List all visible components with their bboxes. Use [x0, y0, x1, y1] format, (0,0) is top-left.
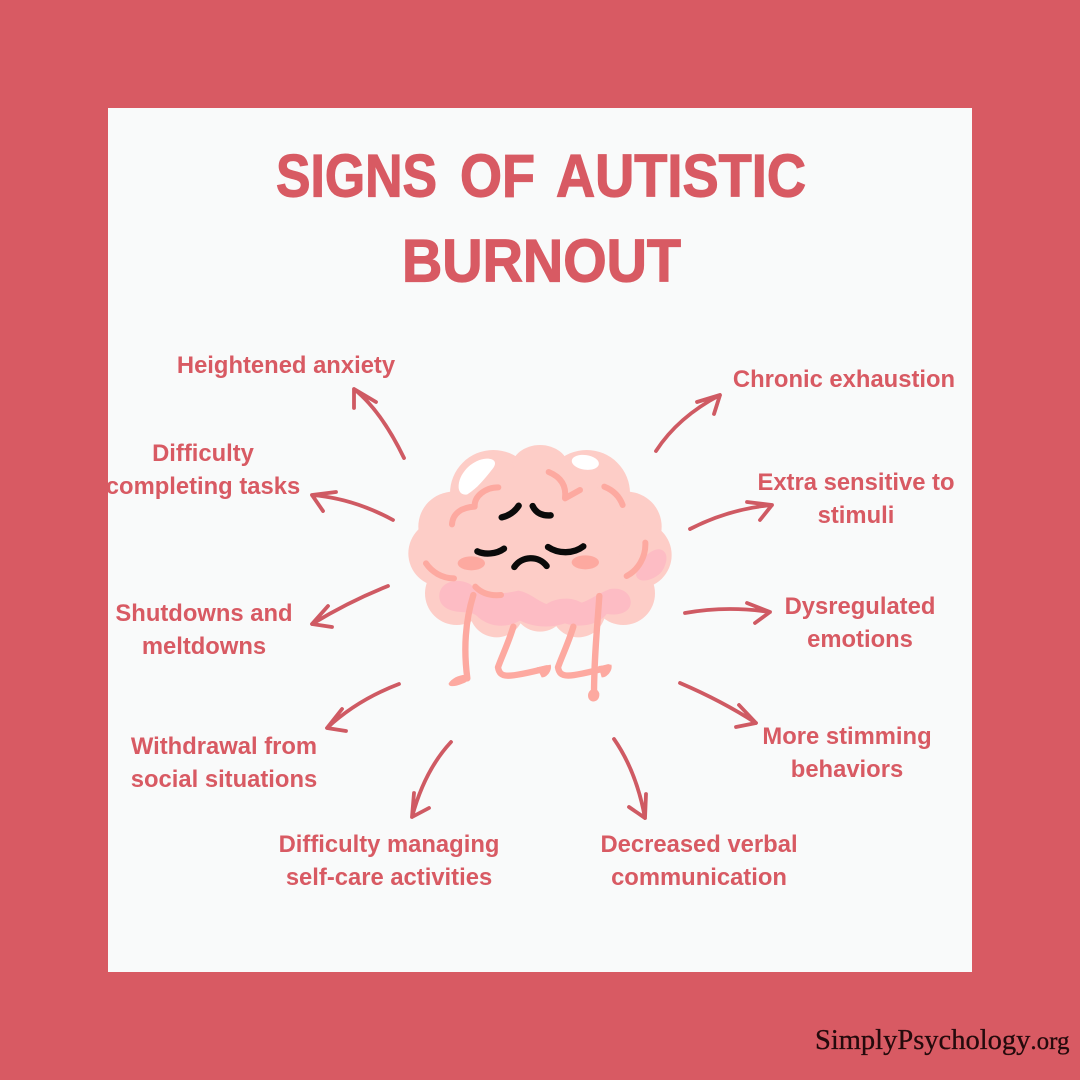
feet [449, 675, 469, 686]
shine highlights [459, 459, 495, 495]
label: Dysregulated emotions: emotions [807, 626, 913, 653]
source credit: SimplyPsychology.org [815, 1025, 1070, 1056]
label: More stimming behaviors: More stimming [762, 723, 932, 750]
label: Decreased verbal communication: Decreased verbal [600, 831, 798, 858]
title: BURNOUT [402, 228, 681, 294]
label: Decreased verbal communication: communication [611, 864, 787, 891]
label: Dysregulated emotions: Dysregulated [785, 593, 935, 620]
label: Difficulty managing self-care activities: Difficulty managing [279, 831, 499, 858]
arrow: to Dysregulated emotions [685, 603, 770, 623]
panel: white card [108, 108, 972, 972]
title: SIGNS [276, 142, 437, 210]
arrow: to Difficulty completing tasks [312, 492, 393, 520]
icon: sad brain character [408, 445, 672, 701]
arrow: to More stimming behaviors [680, 683, 756, 727]
face [477, 506, 583, 567]
title: AUTISTIC [556, 142, 806, 210]
label: Shutdowns and meltdowns: Shutdowns and [115, 600, 293, 627]
arrow: to Chronic exhaustion [656, 395, 720, 451]
label: Chronic exhaustion: Chronic exhaustion [733, 366, 955, 393]
label: Shutdowns and meltdowns: meltdowns [142, 633, 266, 660]
label: Difficulty managing self-care activities: self-care activities [286, 864, 492, 891]
label: Withdrawal from social situations: Withdrawal from [131, 733, 317, 760]
cheeks [458, 556, 485, 570]
brain folds [426, 472, 645, 595]
brain body [408, 445, 672, 637]
arrow: to Heightened anxiety [354, 389, 404, 458]
right pink patch [636, 549, 666, 581]
arrow: to Shutdowns and meltdowns [312, 586, 388, 627]
label: Extra sensitive to stimuli: stimuli [818, 502, 894, 529]
label: Withdrawal from social situations: social situations [131, 766, 317, 793]
label: Difficulty completing tasks: Difficulty [152, 440, 254, 467]
title: OF [460, 142, 535, 210]
arrow: to Extra sensitive to stimuli [690, 502, 772, 529]
arrow: to Decreased verbal communication [614, 739, 646, 818]
arrow: to Difficulty managing self-care activities [412, 742, 451, 817]
label: Heightened anxiety: Heightened anxiety [177, 352, 396, 379]
label: Difficulty completing tasks: completing tasks [106, 473, 300, 500]
label: More stimming behaviors: behaviors [791, 756, 903, 783]
arrow: to Withdrawal from social situations [327, 684, 399, 731]
legs [465, 595, 608, 697]
title [276, 142, 806, 294]
label: Extra sensitive to stimuli: Extra sensitive to [757, 469, 955, 496]
lower pink fold [439, 581, 631, 626]
